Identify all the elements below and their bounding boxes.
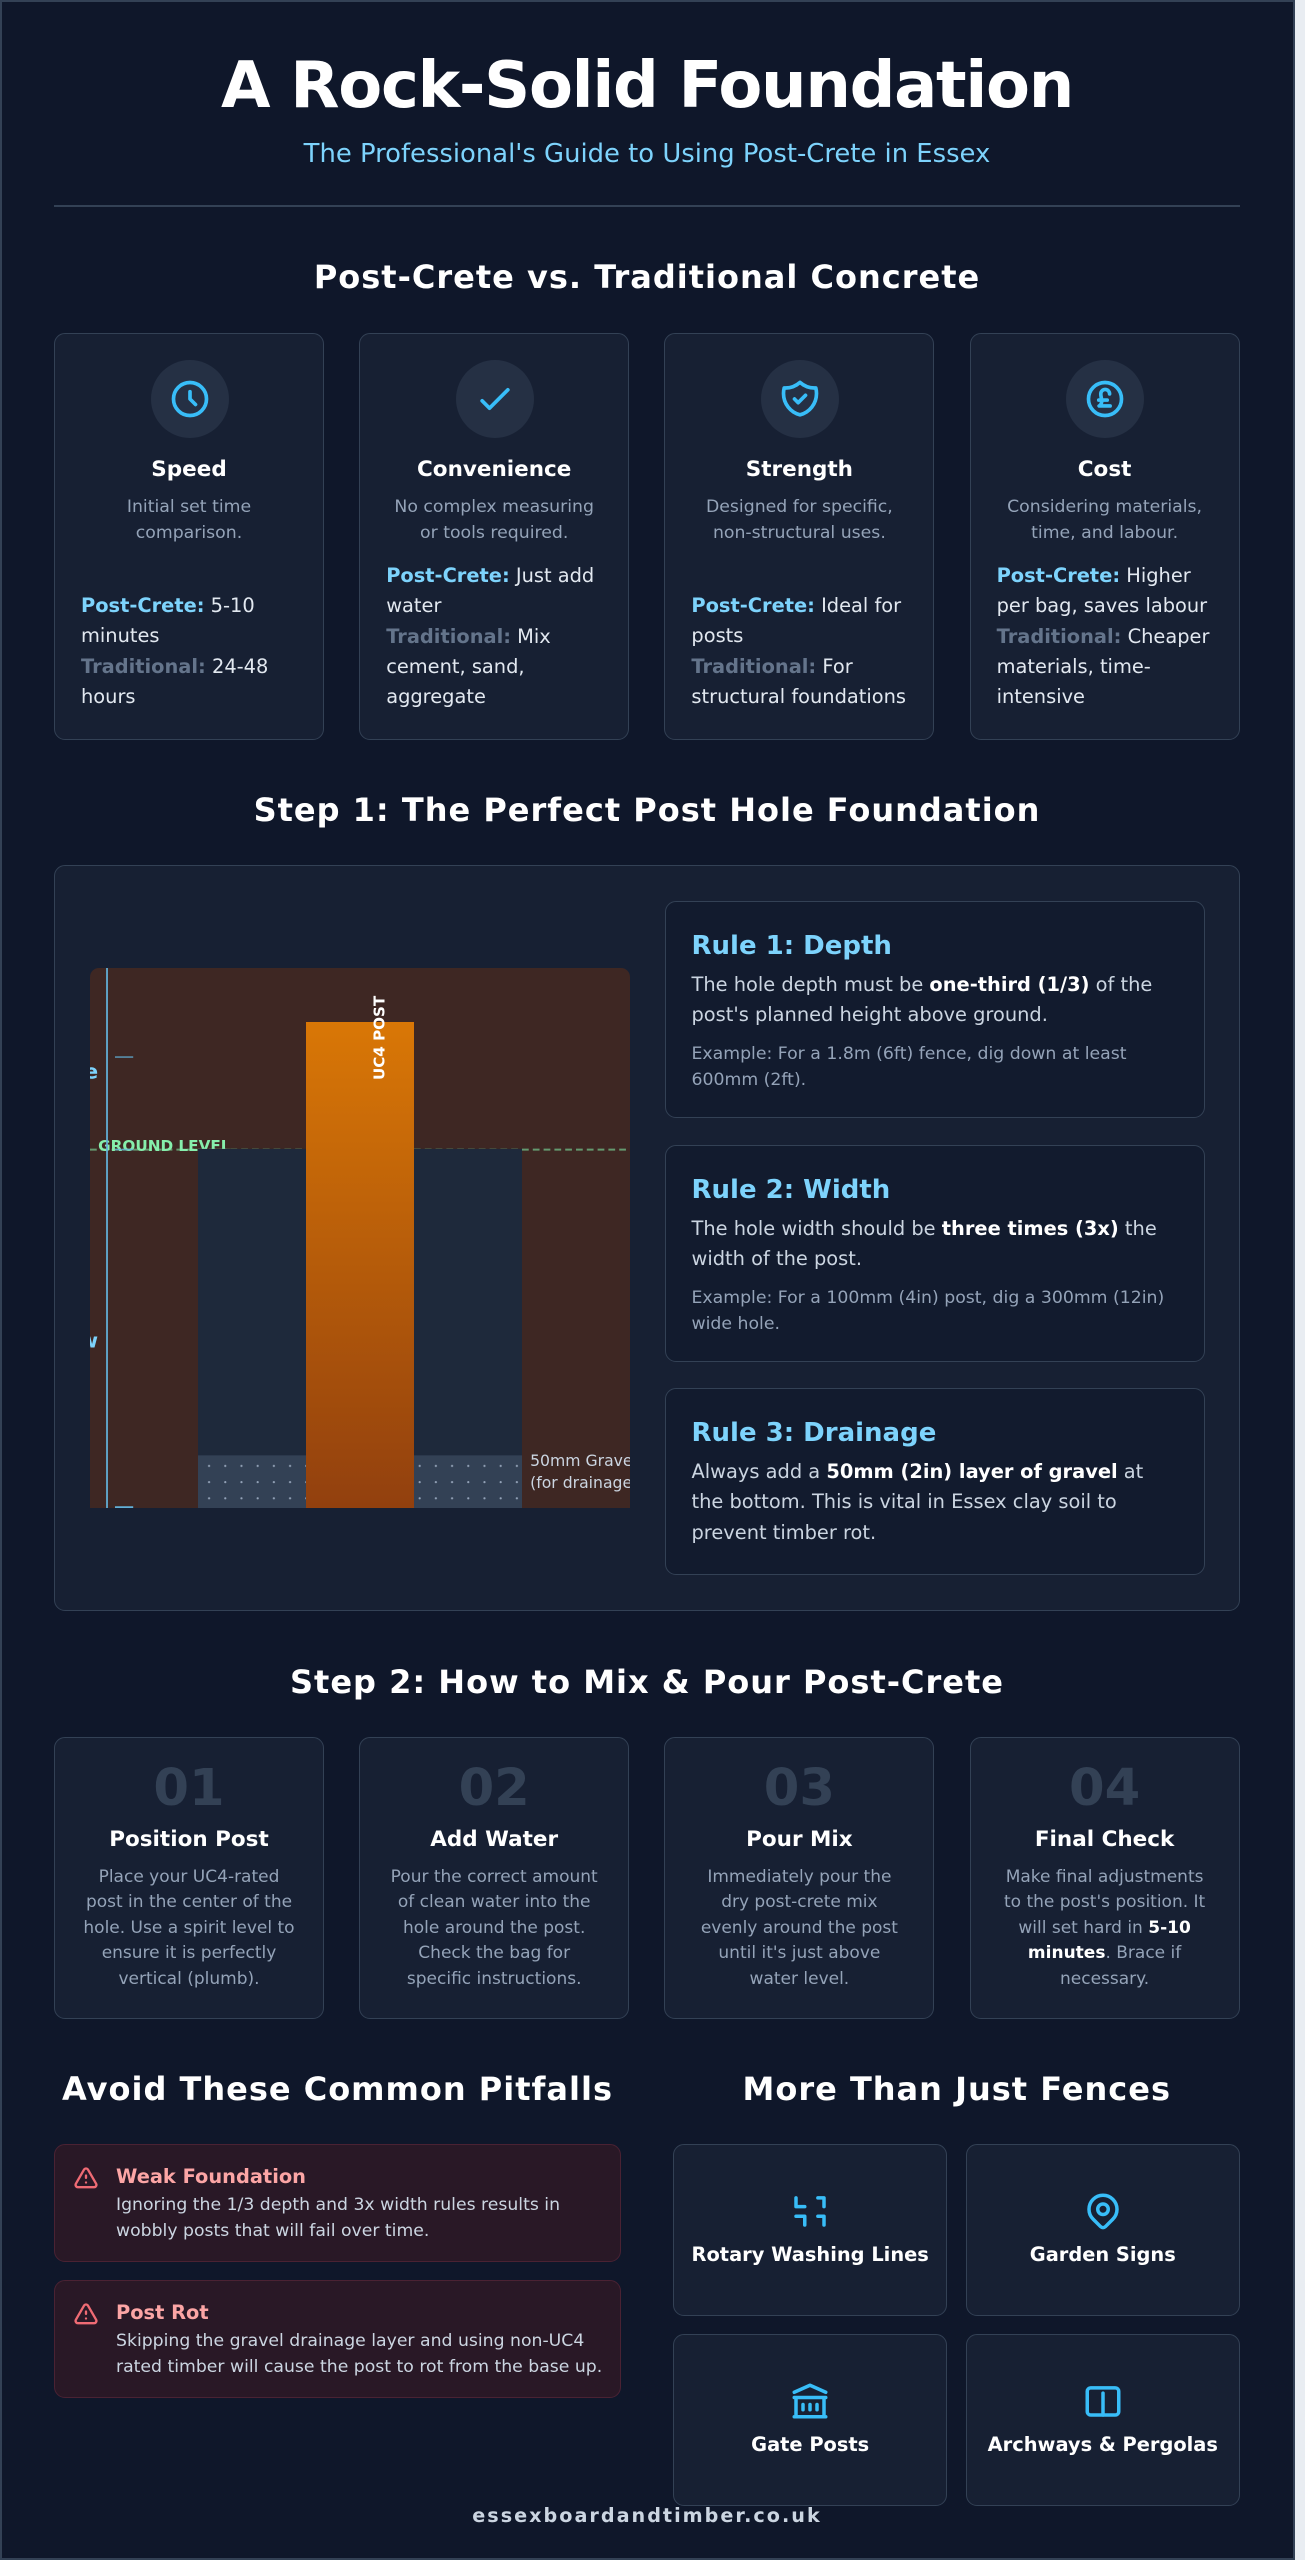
panel: convenience [359,333,629,740]
pitfall title: Post Rot [116,2300,209,2324]
step number: 03 [764,1758,835,1818]
rule example: Example: For a 100mm (4in) post, dig a 300mm (12in) wide hole. [692,1288,1164,1334]
step title: Pour Mix [746,1826,853,1852]
rule 2: width [664,1145,1204,1362]
use label: Archways & Pergolas [988,2433,1218,2456]
dimension line [107,968,133,1508]
heading: pitfalls: Avoid These Common Pitfalls [62,2070,613,2108]
step title: Add Water [430,1826,558,1852]
comparison text: speed [81,594,268,708]
use: gate posts [673,2334,947,2506]
comparison text: speed: Traditional: 24-48 hours [81,655,268,708]
use: garden signs [966,2144,1240,2316]
pitfall text: Ignoring the 1/3 depth and 3x width rules results in [116,2195,560,2215]
gravel layer [198,1455,522,1508]
step text: Immediately pour the dry post-crete mix evenly around the post until it's just above water level. [701,1866,898,1988]
comparison text: strength: Post-Crete: Ideal for posts [691,594,901,647]
pitfall text: rated timber will cause the post to rot from the base up. [116,2357,602,2377]
step 03 [664,1737,934,2019]
use: archways and pergolas [966,2334,1240,2506]
heading: step 1: Step 1: The Perfect Post Hole Foundation [254,791,1040,829]
panel: step 1 [54,865,1240,1611]
step text: Place your UC4-rated post in the center of the hole. Use a spirit level to ensure it is perfectly vertical (plumb). [83,1866,295,1988]
pitfall text: Skipping the gravel drainage layer and using non-UC4 [116,2331,584,2351]
step number: 04 [1069,1758,1140,1818]
pitfall: weak foundation [54,2144,621,2262]
comparison text: strength [691,594,906,708]
comparison text: convenience: Traditional: Mix cement, sand, aggregate [386,625,551,708]
rule heading: Rule 1: Depth [692,930,892,960]
diagram: post hole cross-section [90,968,630,1508]
rule heading: Rule 2: Width [692,1174,890,1204]
comparison text: convenience [386,564,594,708]
icon: arch frame [1086,2386,1120,2417]
comparison text: strength: Traditional: For structural foundations [691,655,906,708]
step 01 [54,1737,324,2019]
rule heading: Rule 3: Drainage [692,1418,936,1448]
rule text: The hole depth must be one-third (1/3) of the post's planned height above ground. [692,973,1152,1026]
rule text: Always add a 50mm (2in) layer of gravel at the bottom. This is vital in Essex clay soil to prevent timber rot. [692,1460,1143,1544]
step text: Make final adjustments to the post's position. It will set hard in 5-10 minutes. Brace if necessary. [1004,1866,1205,1988]
footer: essexboardandtimber.co.uk [472,2504,822,2527]
comparison text: convenience: Post-Crete: Just add water [386,564,594,617]
heading: strength: Strength [746,457,853,482]
step title: Final Check [1035,1826,1174,1852]
description: strength: Designed for specific, non-structural uses. [706,497,893,543]
use label: Garden Signs [1030,2243,1176,2266]
use label: Rotary Washing Lines [692,2243,929,2266]
use label: Gate Posts [751,2433,869,2456]
label: ground level: GROUND LEVEL [98,1137,230,1155]
icon: clock [151,360,229,438]
icon: warning [74,2303,98,2324]
heading: comparison: Post-Crete vs. Traditional Concrete [314,258,980,296]
step title: Position Post [109,1826,269,1852]
rule text: The hole width should be three times (3x) the width of the post. [692,1217,1157,1270]
panel: speed [54,333,324,740]
concrete fill [198,1149,522,1508]
heading: speed: Speed [151,457,227,482]
step number: 01 [153,1758,225,1818]
rule 1: depth [664,901,1204,1118]
step 02 [359,1737,629,2019]
post [306,1022,414,1508]
heading: other uses: More Than Just Fences [742,2070,1171,2108]
description: convenience: No complex measuring or tools required. [394,497,594,543]
icon: warning [74,2167,98,2188]
step text: Pour the correct amount of clean water into the hole around the post. Check the bag for specific instructions. [391,1866,598,1988]
pitfall title: Weak Foundation [116,2164,306,2188]
panel: cost [970,333,1240,740]
icon: building [792,2384,828,2418]
step number: 02 [459,1758,530,1818]
heading: cost: Cost [1078,457,1131,482]
rule example: Example: For a 1.8m (6ft) fence, dig down at least 600mm (2ft). [692,1044,1127,1090]
icon: check [456,360,534,438]
description: cost: Considering materials, time, and labour. [1007,497,1202,543]
pitfall text [116,2331,602,2377]
post label: UC4 POST [370,995,388,1080]
pitfall text: wobbly posts that will fail over time. [116,2221,429,2241]
step 04 [970,1737,1240,2019]
subtitle: The Professional's Guide to Using Post-Crete in Essex [304,139,990,169]
panel: strength [664,333,934,740]
comparison text: cost [996,564,1210,708]
heading: convenience: Convenience [417,457,571,482]
pitfall: post rot [54,2280,621,2398]
icon: pound [1066,360,1144,438]
comparison text: speed: Post-Crete: 5-10 minutes [81,594,255,647]
description: speed: Initial set time comparison. [127,497,251,543]
comparison text: cost: Post-Crete: Higher per bag, saves labour [997,564,1207,617]
heading: step 2: Step 2: How to Mix & Pour Post-Crete [290,1663,1004,1701]
icon: location pin [1087,2194,1119,2230]
rule 3: drainage [664,1388,1204,1575]
use: rotary washing lines [673,2144,947,2316]
title: A Rock-Solid Foundation [221,48,1073,122]
icon: shield [761,360,839,438]
icon: corners [794,2196,826,2227]
comparison text: cost: Traditional: Cheaper materials, time-intensive [997,625,1209,708]
pitfall text [116,2195,560,2241]
